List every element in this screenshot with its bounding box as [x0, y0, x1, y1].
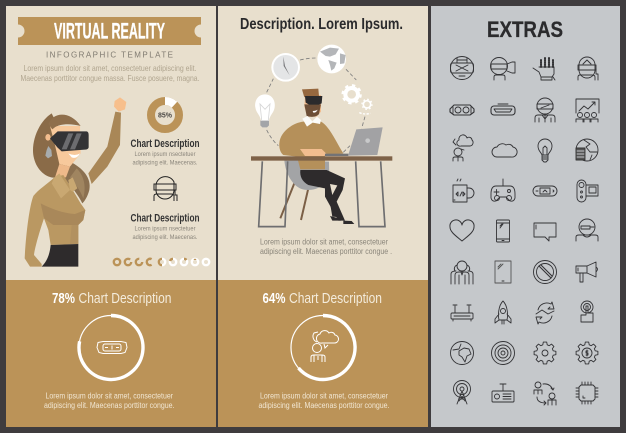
- icon: light bulb: [255, 94, 275, 127]
- donut chart 85%: [151, 101, 179, 129]
- heading 64%: 64%: [262, 290, 286, 307]
- illustration: woman in VR headset: [25, 97, 126, 267]
- text block bottom 2: [258, 392, 390, 410]
- icon: person with cloud: [311, 331, 339, 362]
- ring chart 64%: [291, 315, 355, 380]
- head: [302, 89, 322, 127]
- intro text: [20, 63, 200, 83]
- icon: white goggles: [97, 342, 127, 354]
- chart description 1: adipiscing elit. Maecenas.: [132, 160, 198, 166]
- heading 78%: 78%: [52, 290, 75, 307]
- icon: router: [451, 305, 473, 321]
- icon: data glove: [533, 57, 555, 80]
- heading 64%: Chart Description: [289, 290, 382, 307]
- intro text: Maecenas porttitor congue massa. Fusce posuere, magna.: [20, 73, 200, 83]
- icon: man with visor: [535, 98, 555, 122]
- heading 78%: Chart Description: [78, 290, 172, 307]
- icon: person with cloud: [453, 135, 473, 161]
- icon: VR head: [450, 56, 474, 80]
- icon: speech bubble: [534, 223, 556, 241]
- heading: Description. Lorem Ipsum.: [240, 16, 403, 33]
- title banner: [18, 17, 201, 45]
- icon: person with head device: [576, 219, 598, 241]
- text block bottom 2: adipiscing elit. Maecenas porttitor congue.: [258, 401, 390, 410]
- icon: cloud: [492, 144, 517, 157]
- icon: rocket: [495, 301, 511, 324]
- dashed orbit: [267, 58, 365, 152]
- icon: VR goggles: [450, 105, 474, 115]
- text block: Lorem ipsum dolor sit amet, consectetuer: [260, 238, 388, 246]
- icon: group: [451, 261, 473, 284]
- panel: virtual reality: [6, 6, 216, 427]
- chart description 2: adipiscing elit. Maecenas.: [132, 234, 198, 241]
- text block: adipiscing elit. Maecenas porttitor congue .: [260, 247, 392, 256]
- icon: camcorder: [577, 180, 598, 202]
- heading 78%: [52, 290, 172, 307]
- chart description 2: Chart Description: [130, 212, 200, 224]
- icon: projector: [492, 384, 514, 402]
- donut chart 85%: 85%: [158, 112, 173, 120]
- text block bottom 2: Lorem ipsum dolor sit amet, consectetuer: [260, 392, 388, 400]
- icon: bulb: [538, 139, 552, 162]
- text block: [260, 238, 392, 256]
- icon: target: [492, 342, 514, 364]
- chart description 1: [130, 138, 200, 166]
- heading: EXTRAS: [487, 17, 563, 42]
- text block bottom 1: [44, 392, 174, 410]
- icon: sync arrows: [536, 302, 554, 324]
- icon: radio tower: [454, 380, 470, 404]
- title banner: VIRTUAL REALITY: [54, 18, 165, 44]
- icon: VR strip: [491, 104, 515, 115]
- laptop: [325, 127, 383, 156]
- icon: prohibited: [534, 260, 556, 284]
- icon: gear with dollar: [576, 342, 598, 364]
- icon: tablet: [495, 261, 511, 283]
- icon: gear: [534, 342, 556, 364]
- desk: [251, 156, 392, 227]
- icon: globe africa: [450, 342, 474, 364]
- chart description 2: Lorem ipsum nsectetuer: [134, 226, 196, 232]
- text block bottom 1: adipiscing elit. Maecenas porttitor congue.: [44, 401, 174, 410]
- icon: head with camera: [490, 58, 515, 80]
- chart description 1: Chart Description: [130, 138, 200, 150]
- icon: head with VR visor: [154, 177, 177, 201]
- trousers and shoes: [300, 170, 354, 224]
- chart description 2: [130, 212, 200, 241]
- hand and forearm: [300, 149, 327, 156]
- icon: globe: [317, 45, 346, 73]
- heading 64%: [262, 290, 382, 307]
- chart description 1: Lorem ipsum nsectetuer: [134, 151, 196, 158]
- sweater: [279, 122, 343, 169]
- subtitle: INFOGRAPHIC TEMPLATE: [46, 50, 173, 60]
- icon: megaphone: [576, 262, 598, 282]
- illustration: man at desk in VR: [251, 45, 392, 227]
- trouser gap: [330, 184, 337, 195]
- icon: gamepad: [491, 179, 515, 201]
- ring chart 78%: [79, 316, 143, 380]
- icon grid: [450, 56, 599, 405]
- panel: description: [218, 6, 428, 427]
- icon: people exchange: [534, 382, 556, 405]
- text block bottom 1: Lorem ipsum dolor sit amet, consectetuer: [46, 392, 173, 400]
- icon: clock: [271, 53, 300, 82]
- icon: chart board: [576, 99, 599, 122]
- icon: heart: [450, 220, 474, 241]
- chair: [280, 141, 329, 220]
- icon: code mug: [453, 179, 474, 202]
- icon: microchip: [576, 382, 598, 404]
- icon: phone: [496, 220, 510, 242]
- panel: extras: [431, 6, 620, 427]
- progress dots: [114, 258, 209, 266]
- icon: touch button: [581, 301, 593, 322]
- icon: head with visor: [578, 57, 598, 80]
- icon: gears: [343, 85, 372, 114]
- intro text: Lorem ipsum dolor sit amet, consectetuer adipiscing elit.: [24, 63, 196, 73]
- icon: globe with document: [576, 139, 598, 161]
- icon: handheld console: [533, 186, 557, 196]
